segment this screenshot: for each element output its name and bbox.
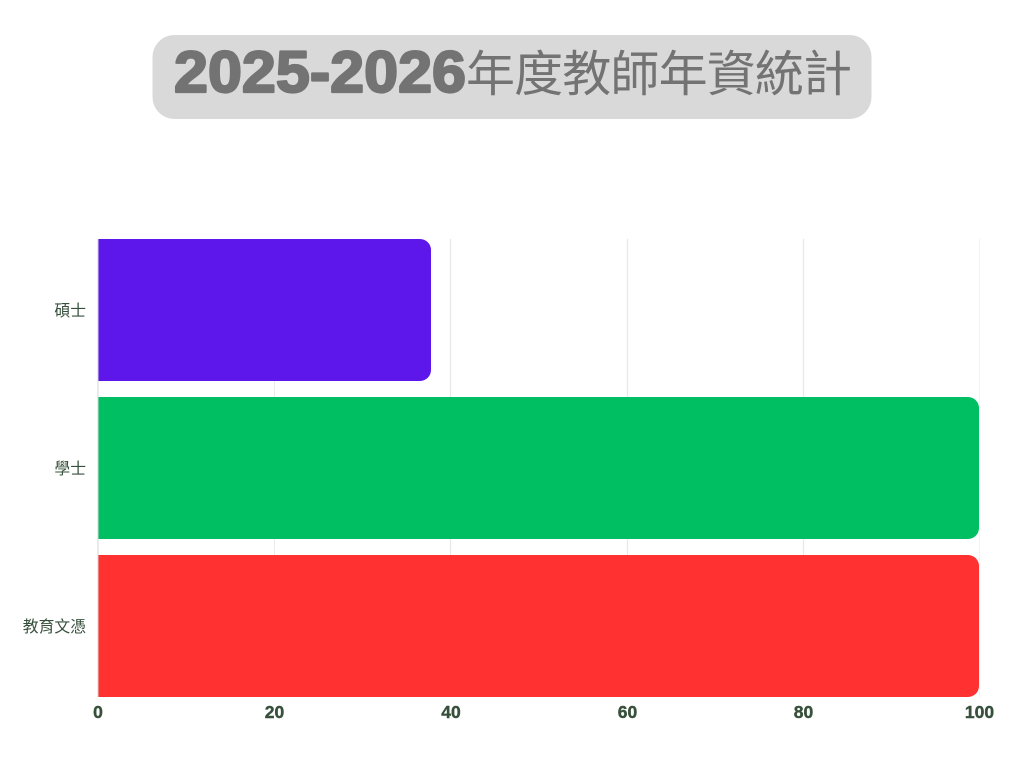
axis labels: 40 (441, 702, 461, 722)
axis labels (93, 702, 994, 722)
category labels (23, 302, 86, 636)
title (152, 35, 872, 119)
category labels: 碩士 (54, 302, 86, 320)
axis labels: 60 (618, 702, 637, 722)
axis labels: 0 (93, 702, 103, 722)
axis labels: 20 (265, 702, 284, 722)
bar: 碩士 (98, 239, 431, 381)
category labels: 學士 (54, 460, 86, 478)
bar chart (23, 239, 994, 722)
axis labels: 100 (965, 702, 994, 722)
title: 年度教師年資統計 (466, 48, 852, 102)
bar: 學士 (98, 397, 979, 539)
title: 2025-2026 (174, 40, 466, 105)
bar: 教育文憑 (98, 555, 979, 697)
axis labels: 80 (794, 702, 813, 722)
category labels: 教育文憑 (23, 617, 86, 636)
